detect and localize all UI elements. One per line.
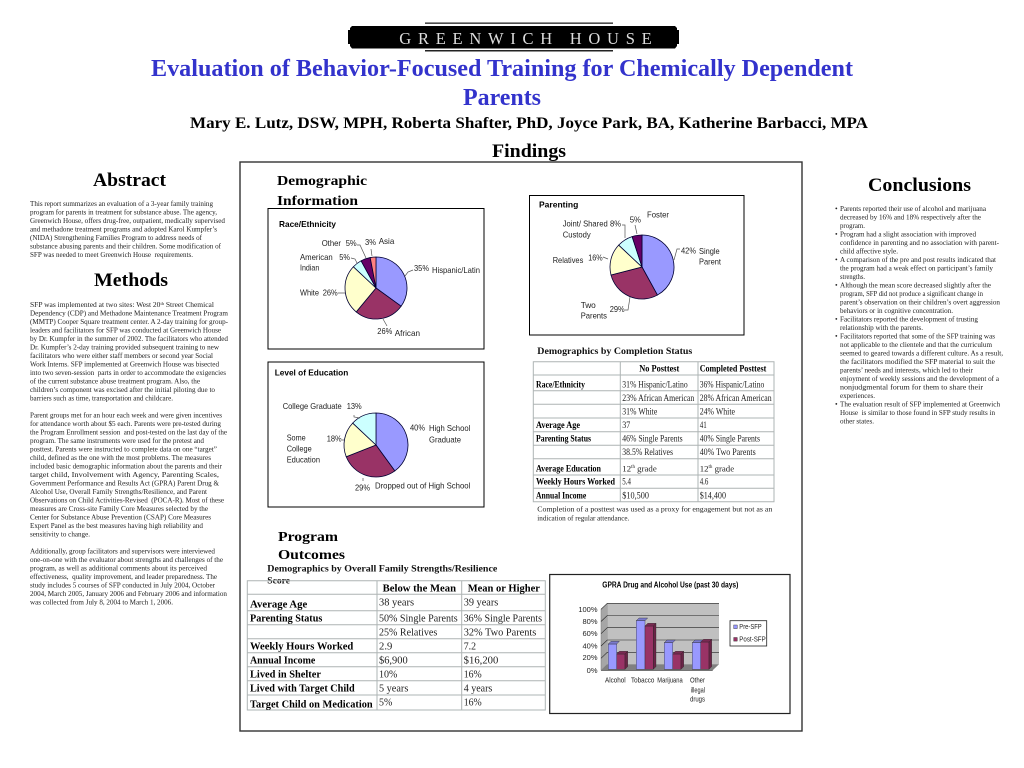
note: completion proxy: Completion of a posttest was used as a proxy for engagement but not as an <box>537 505 773 514</box>
chart: parenting pie: 8% <box>610 219 622 229</box>
panel: methods <box>30 270 228 606</box>
note: completion proxy <box>537 505 773 522</box>
text block: conclusions bullets: behaviors or in cognitive concentration. <box>840 306 953 315</box>
table: demographics by completion status: Average Age <box>536 420 581 431</box>
table: demographics by completion status: th <box>708 465 713 470</box>
chart: race/ethnicity pie: 3% <box>365 237 377 247</box>
chart: parenting pie: Parents <box>581 311 607 321</box>
text block: methods body: into two seven-session parts in order to accommodate the exigencies <box>30 368 226 377</box>
table: demographics by overall family strengths score: Lived with Target Child <box>250 684 355 695</box>
table: demographics by overall family strengths score: Annual Income <box>250 656 316 667</box>
text block: conclusions bullets: Parents reported their use of alcohol and marijuana <box>840 204 987 213</box>
text block: conclusions bullets: • <box>835 332 838 340</box>
table: demographics by completion status: $10,500 <box>622 491 649 502</box>
text block: conclusions bullets: • <box>835 230 838 238</box>
text block: abstract body: Greenwich House, offers drug-free, outpatient, medically supervised <box>30 216 225 225</box>
table: demographics by overall family strengths score: Weekly Hours Worked <box>250 642 353 653</box>
heading: Abstract: Abstract <box>93 170 167 191</box>
y-axis labels: 100% <box>578 605 598 614</box>
table: demographics by completion status: 12 <box>622 463 631 473</box>
table: demographics by overall family strengths score: Average Age <box>250 600 308 611</box>
x-axis labels: illegal <box>691 685 705 694</box>
text block: abstract body: (NIDA) Strengthening Families Program to address needs of <box>30 233 202 242</box>
title: Evaluation of Behavior-Focused Training for Chemically Dependent <box>151 56 853 82</box>
text block: conclusions bullets: Although the mean score decreased slightly after the <box>840 280 992 290</box>
table: demographics by overall family strengths score: 10% <box>379 669 397 680</box>
chart: level of education pie: 18% <box>327 434 342 444</box>
chart: race/ethnicity pie <box>268 208 484 349</box>
text block: conclusions bullets: program, SFP did not produce a significant change in <box>840 289 983 298</box>
text block: conclusions bullets: strengths. <box>840 272 865 281</box>
chart: race/ethnicity pie: Hispanic/Latin <box>432 265 480 275</box>
table: demographics by overall family strengths score: Below the Mean <box>383 584 456 595</box>
heading: Program Outcomes: Outcomes <box>278 547 345 562</box>
table: demographics by overall family strengths score: Target Child on Medication <box>250 699 373 710</box>
table: demographics by completion status: 40% Two Parents <box>700 447 756 458</box>
chart: race/ethnicity pie: White <box>300 288 319 298</box>
table: demographics by overall family strengths score: 32% Two Parents <box>464 627 536 638</box>
text block: conclusions bullets: nonjudgmental forum for them to share their <box>840 382 984 392</box>
text block: methods body: for attendance worth about $5 each. Parents were pre-tested during <box>30 419 221 428</box>
logo: Greenwich House banner <box>348 22 679 52</box>
text block: methods body: included basic demographic information about the parents and their <box>30 462 222 470</box>
chart: parenting pie: Single <box>699 246 720 256</box>
text block: conclusions bullets: the program had a weak effect on participant’s family <box>840 264 993 272</box>
table: demographics by completion status: 28% African American <box>700 393 772 404</box>
panel: findings frame <box>240 162 802 731</box>
text block: methods body: barriers such as time, transportation and childcare. <box>30 394 173 402</box>
table: demographics by completion status: Race/Ethnicity <box>536 379 585 390</box>
y-axis labels: 40% <box>582 641 598 650</box>
3D walls and floor <box>601 603 719 670</box>
table: demographics by overall family strengths score: Parenting Status <box>250 613 322 624</box>
text block: conclusions bullets: • <box>835 255 838 264</box>
text block: conclusions bullets: Program had a slight association with improved <box>840 230 976 238</box>
table: demographics by overall family strengths score: 50% Single Parents <box>379 613 458 624</box>
table: demographics by completion status: $14,400 <box>700 491 726 502</box>
text block: conclusions bullets: not applicable to the clientele and that the curriculum <box>840 340 992 349</box>
heading: Conclusions: Conclusions <box>868 175 971 196</box>
heading: Demographic Information: Demographic <box>277 173 367 188</box>
text block: conclusions bullets: • <box>835 314 838 324</box>
chart: parenting pie <box>530 196 744 335</box>
text block: abstract body: This report summarizes an evaluation of a 3-year family training <box>30 199 213 208</box>
text block: abstract body: SFP was needed to meet Greenwich House requirements. <box>30 250 193 259</box>
table: demographics by overall family strengths score: 5% <box>379 697 392 708</box>
legend: Post-SFP <box>739 634 766 644</box>
chart: race/ethnicity pie: African <box>395 328 420 338</box>
panel: conclusions <box>835 175 1003 426</box>
text block: conclusions bullets: the facilitators modified the SFP material to suit the <box>840 357 996 366</box>
chart: parenting pie: 5% <box>630 215 642 225</box>
table: demographics by overall family strengths score: 5 years <box>379 684 408 695</box>
heading: Methods: Methods <box>94 270 168 291</box>
legend <box>730 621 767 646</box>
chart: level of education pie: Some <box>287 433 306 443</box>
y-axis labels: 20% <box>582 653 598 662</box>
table: demographics by overall family strengths score <box>247 581 545 710</box>
text block: conclusions bullets: • <box>835 280 838 290</box>
text block: methods body: Work Interns. SFP implemented at Greenwich House was bisected <box>30 360 219 368</box>
text block: conclusions bullets: The evaluation result of SFP implemented at Greenwich <box>840 400 1000 408</box>
chart: level of education pie: College <box>287 444 312 454</box>
chart: level of education pie <box>268 362 484 507</box>
text block: conclusions bullets: decreased by 16% and 18% respectively after the <box>840 212 982 222</box>
chart: level of education pie: 40% <box>410 422 426 432</box>
chart: race/ethnicity pie: American <box>300 252 333 262</box>
table: demographics by overall family strengths score: 25% Relatives <box>379 627 437 638</box>
text block: methods body: child, defined as the one with the most problems. The measures <box>30 453 211 462</box>
table: demographics by completion status: grade <box>712 463 734 473</box>
text block: conclusions bullets: Facilitators reported that some of the SFP training was <box>840 332 995 340</box>
text block: methods body: Government Performance and Results Act (GPRA) Parent Drug & <box>30 478 219 488</box>
text block: methods body: th <box>160 301 165 306</box>
table: demographics by completion status: Annual Income <box>536 491 587 502</box>
text block: methods body: by Dr. Kumpfer in the summer of 2002. The facilitators who attended <box>30 334 228 343</box>
table: demographics by overall family strengths score: Lived in Shelter <box>250 669 321 680</box>
heading: Demographics by Completion Status: Demographics by Completion Status <box>537 346 693 357</box>
heading: Program Outcomes <box>278 529 345 562</box>
text block: methods body: effectiveness, quality improvement, and leader preparedness. The <box>30 572 218 581</box>
table: demographics by overall family strengths score: 16% <box>464 669 482 680</box>
text block: conclusions bullets: A comparison of the pre and post results indicated that <box>840 255 997 264</box>
heading: Demographics by Overall Family Strengths/Resilience Score <box>267 564 498 586</box>
text block: conclusions bullets: parent’s observation on their children’s overt aggression <box>840 298 1000 306</box>
heading: Demographic Information: Information <box>277 193 359 208</box>
text block: methods body: measures are Cross-site Family Core Measures selected by the <box>30 504 209 513</box>
table: demographics by overall family strengths score: 7.2 <box>464 642 476 653</box>
chart: parenting pie: 42% <box>681 245 697 255</box>
heading: Demographics by Overall Family Strengths/Resilience Score: Demographics by Overall Family Strengths/Resilience <box>267 564 498 575</box>
text block: conclusions bullets: • <box>835 400 838 408</box>
text block: methods body: one-on-one with the evaluator about strengths and challenges of the <box>30 555 224 564</box>
text block: methods body: sensitivity to change. <box>30 530 90 538</box>
y-axis labels: 0% <box>587 666 598 675</box>
x-axis labels: Alcohol <box>605 675 626 684</box>
title <box>151 56 853 111</box>
table: demographics by completion status: 23% African American <box>622 393 694 404</box>
text block: conclusions bullets: seemed to geared towards a different culture. As a result, <box>840 348 1003 358</box>
table: demographics by completion status: Average Education <box>536 463 602 474</box>
chart: level of education pie: Level of Education <box>275 368 348 378</box>
chart: GPRA drug and alcohol use bar chart: GPRA Drug and Alcohol Use (past 30 days) <box>602 580 739 589</box>
text block: methods body: Alcohol Use, Overall Family Strengths/Resilience, and Parent <box>30 487 208 496</box>
text block: methods body: facilitators who were either staff members or second year Social <box>30 351 213 360</box>
text block: conclusions bullets <box>835 204 1003 426</box>
text block: methods body: Expert Panel as the best measures having high reliability and <box>30 521 203 530</box>
x-axis labels: Marijuana <box>657 675 683 684</box>
text block: methods body: posttest. Parents were instructed to complete data on one “target” <box>30 444 217 454</box>
text block: methods body: target child, Involvement with Agency, Parenting Scales, <box>30 470 219 479</box>
table: demographics by overall family strengths score: 4 years <box>464 684 492 695</box>
text block: conclusions bullets: House is similar to those found in SFP study results in <box>840 408 995 417</box>
table: demographics by completion status: 40% Single Parents <box>700 434 760 445</box>
text block: conclusions bullets: parents’ needs and interests, which led to their <box>840 366 973 374</box>
text block: conclusions bullets: Facilitators reported the development of trusting <box>840 314 978 324</box>
text block: methods body: 2004, March 2005, January 2006 and February 2006 and information <box>30 589 227 598</box>
note: completion proxy: indication of regular attendance. <box>537 513 629 522</box>
chart: level of education pie: 29% <box>355 483 371 493</box>
text block: conclusions bullets: program. <box>840 221 865 230</box>
table: demographics by overall family strengths score: 2.9 <box>379 642 392 653</box>
table: demographics by completion status: No Posttest <box>639 364 680 375</box>
text block: conclusions bullets: child affective style. <box>840 246 898 256</box>
chart: parenting pie: Joint/ Shared <box>563 219 608 229</box>
chart: race/ethnicity pie: 5% <box>339 252 351 262</box>
table: demographics by overall family strengths score: 16% <box>464 697 482 708</box>
text block: conclusions bullets: relationship with the parents. <box>840 323 923 332</box>
heading: Findings: Findings <box>492 141 566 162</box>
text block: methods body: Parent groups met for an hour each week and were given incentives <box>30 410 222 420</box>
x-axis labels <box>605 675 705 704</box>
chart: parenting pie: Parenting <box>539 199 578 209</box>
table: demographics by completion status: Completed Posttest <box>700 364 767 375</box>
table: demographics by completion status: Parenting Status <box>536 434 591 445</box>
table: demographics by overall family strengths score: $6,900 <box>379 656 408 667</box>
chart: level of education pie: High School <box>429 423 470 433</box>
text block: methods body: (MMTP) Cooper Square treatment center. A 2-day training for group- <box>30 317 228 326</box>
chart: GPRA drug and alcohol use bar chart <box>550 574 790 714</box>
text block: methods body: of the current substance abuse treatment program. Also, the <box>30 376 201 386</box>
table: demographics by completion status: 5.4 <box>622 477 631 488</box>
table: demographics by completion status: 37 <box>622 420 630 431</box>
text block: conclusions bullets: • <box>835 204 838 213</box>
text block: methods body: Additionally, group facilitators and supervisors were interviewed <box>30 546 215 556</box>
table: demographics by completion status: 41 <box>700 420 707 431</box>
chart: race/ethnicity pie: Asia <box>379 236 395 246</box>
authors: Mary E. Lutz, DSW, MPH, Roberta Shafter, PhD, Joyce Park, BA, Katherine Barbacci, MPA <box>190 115 868 132</box>
chart: race/ethnicity pie: 26% <box>323 288 338 298</box>
table: demographics by completion status: 4.6 <box>700 477 709 488</box>
table: demographics by completion status: Weekly Hours Worked <box>536 477 616 488</box>
text block: methods body: study includes 5 courses of SFP conducted in July 2004, October <box>30 580 215 590</box>
chart: race/ethnicity pie: 26% <box>377 326 393 336</box>
y-axis labels <box>578 605 598 675</box>
table: demographics by overall family strengths score: Mean or Higher <box>468 584 540 595</box>
chart: parenting pie: Relatives <box>553 255 583 265</box>
chart: parenting pie: 16% <box>588 252 603 262</box>
text block: conclusions bullets: enjoyment of weekly sessions and the development of a <box>840 374 1000 383</box>
text block: conclusions bullets: experiences. <box>840 391 875 400</box>
text block: abstract body <box>30 199 225 259</box>
chart: race/ethnicity pie: Indian <box>300 263 320 273</box>
logo: Greenwich House banner: GREENWICH HOUSE <box>399 29 652 48</box>
text block: methods body: was collected from July 8, 2004 to March 1, 2006. <box>30 598 173 606</box>
table: demographics by completion status: 36% Hispanic/Latino <box>700 379 764 390</box>
chart: parenting pie: Custody <box>563 230 591 240</box>
x-axis labels: Tobacco <box>631 675 654 684</box>
chart: race/ethnicity pie: 5% <box>346 238 357 248</box>
legend: Pre-SFP <box>739 622 762 631</box>
x-axis labels: Other <box>690 675 705 684</box>
chart: parenting pie: Parent <box>699 257 722 267</box>
text block: methods body: program. The same instruments were used for the pretest and <box>30 436 204 445</box>
table: demographics by completion status: 38.5% Relatives <box>622 447 673 458</box>
heading: Program Outcomes: Program <box>278 529 339 544</box>
text block: methods body: the Program Enrollment session and post-tested on the last day of the <box>30 428 228 436</box>
chart: parenting pie: 29% <box>610 304 625 314</box>
text block: methods body: Dependency (CDP) and Methadone Maintenance Treatment Program <box>30 308 228 318</box>
text block: methods body: program, as well as additional comments about its perceived <box>30 564 207 572</box>
text block: abstract body: substance abusing parents and their children. Some modification of <box>30 242 221 250</box>
y-axis labels: 60% <box>582 629 598 638</box>
text block: abstract body: program for parents in treatment for substance abuse. The agency, <box>30 208 217 216</box>
table: demographics by completion status: grade <box>635 463 657 473</box>
text block: methods body: leaders and facilitators for SFP was conducted at Greenwich House <box>30 326 222 334</box>
chart: level of education pie: College Graduate <box>283 401 342 411</box>
chart: race/ethnicity pie: 35% <box>414 263 430 273</box>
text block: methods body: Observations on Child Activities-Revised (POCA-R). Most of these <box>30 496 225 504</box>
bars: Pre-SFP and Post-SFP <box>608 618 712 669</box>
table: demographics by overall family strengths score: $16,200 <box>464 656 498 667</box>
chart: level of education pie: 13% <box>347 401 362 411</box>
panel: abstract <box>30 170 225 259</box>
chart: race/ethnicity pie: Other <box>322 238 341 248</box>
table: demographics by overall family strengths score: 39 years <box>464 598 498 609</box>
text block: methods body: SFP was implemented at two sites: West 20 <box>30 300 160 309</box>
text block: methods body: children’s component was excised after the initial piloting due to <box>30 385 215 394</box>
table: demographics by completion status: th <box>631 465 635 470</box>
table: demographics by completion status: 31% White <box>622 407 657 418</box>
chart: level of education pie: Graduate <box>429 434 461 444</box>
title: Parents <box>463 85 541 111</box>
chart: level of education pie: Dropped out of High School <box>375 480 470 490</box>
text block: methods body: Street Chemical <box>164 300 214 309</box>
text block: conclusions bullets: confidence in parenting and no association with parent- <box>840 238 999 247</box>
text block: methods body: Center for Substance Abuse Prevention (CSAP) Core Measures <box>30 512 211 522</box>
table: demographics by overall family strengths score: 36% Single Parents <box>464 613 542 624</box>
chart: parenting pie: Foster <box>647 210 669 220</box>
heading: Demographics by Overall Family Strengths/Resilience Score: Score <box>267 575 291 586</box>
chart: level of education pie: Education <box>287 454 320 464</box>
text block: methods body <box>30 300 228 606</box>
table: demographics by completion status <box>533 362 774 502</box>
text block: abstract body: and methadone treatment programs and adopted Karol Kumpfer’s <box>30 224 217 234</box>
heading: Demographic Information <box>277 173 367 208</box>
table: demographics by completion status: 46% Single Parents <box>622 434 683 445</box>
table: demographics by completion status: 24% White <box>700 407 735 418</box>
text block: conclusions bullets: other states. <box>840 416 874 426</box>
y-axis labels: 80% <box>582 617 598 626</box>
x-axis labels: drugs <box>690 695 705 704</box>
text block: methods body: Dr. Kumpfer’s 2-day training provided subsequent training to new <box>30 342 220 352</box>
table: demographics by completion status: 12 <box>700 463 708 473</box>
chart: race/ethnicity pie: Race/Ethnicity <box>279 219 336 229</box>
table: demographics by overall family strengths score: 38 years <box>379 598 414 609</box>
chart: parenting pie: Two <box>581 300 596 310</box>
table: demographics by completion status: 31% Hispanic/Latino <box>622 379 688 390</box>
